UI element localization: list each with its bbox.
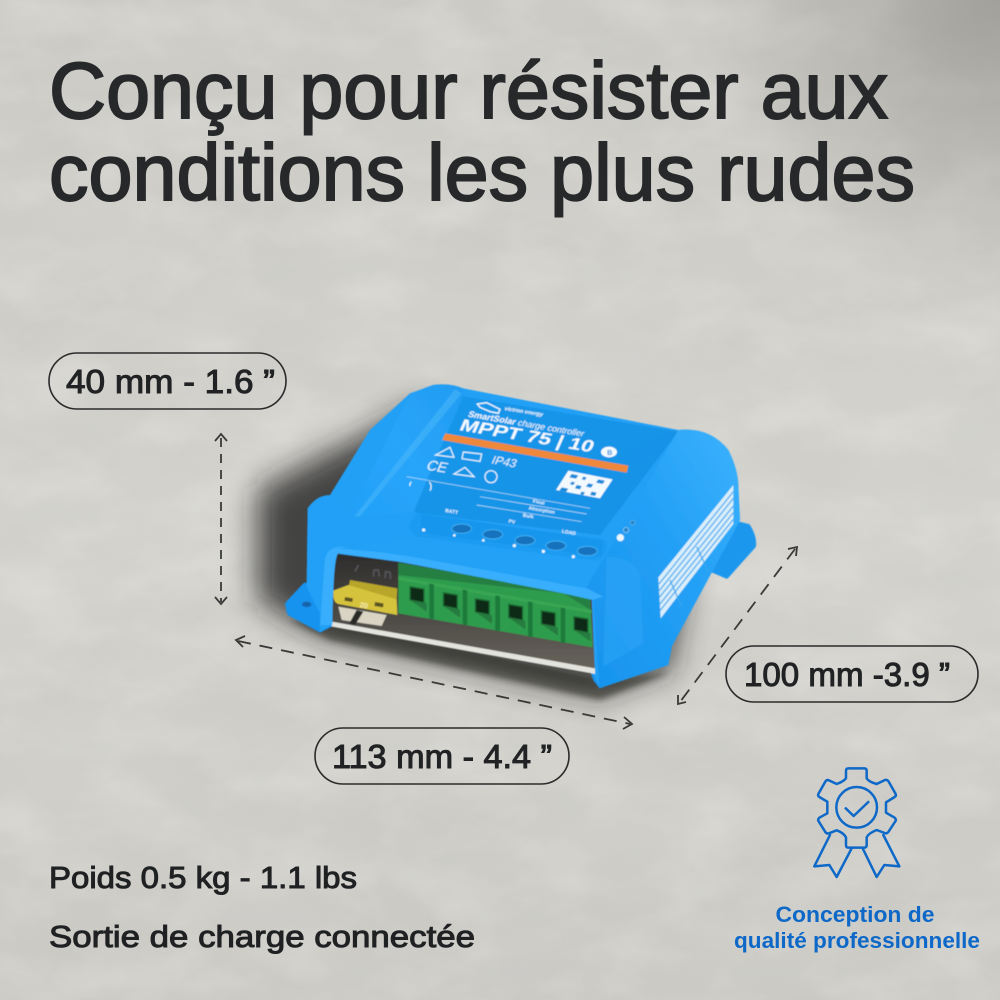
product: MPPT charge controller bbox=[287, 384, 754, 688]
depth pill: 100 mm -3.9 ” bbox=[744, 656, 950, 693]
product: MPPT charge controller: B bbox=[607, 448, 612, 457]
right rear mounting flange bbox=[703, 523, 754, 577]
title bbox=[49, 46, 915, 217]
dimension arrow: width bbox=[236, 636, 632, 729]
weight text: Poids 0.5 kg - 1.1 lbs bbox=[49, 860, 357, 895]
certification icons bbox=[410, 447, 497, 491]
bluetooth badge bbox=[601, 447, 617, 457]
top label: brand: victron energy bbox=[503, 406, 545, 418]
left mounting flange bbox=[287, 585, 335, 630]
green connector block bbox=[398, 563, 593, 647]
top panel bbox=[413, 396, 678, 535]
right front mounting flange bbox=[587, 643, 670, 686]
certification text bbox=[424, 453, 520, 477]
yellow fuse bbox=[333, 580, 397, 615]
main body bbox=[307, 384, 740, 688]
charge data table: PV bbox=[508, 519, 516, 526]
height pill: 40 mm - 1.6 ” bbox=[66, 363, 275, 400]
title: Conçu pour résister aux bbox=[49, 46, 888, 135]
battery terminal opening bbox=[332, 553, 595, 673]
terminal screw strip bbox=[409, 513, 607, 560]
device shadow bbox=[258, 405, 690, 700]
charge data table: BATT bbox=[445, 508, 458, 516]
load output text: Sortie de charge connectée bbox=[49, 919, 475, 954]
left rail bbox=[350, 384, 464, 523]
status LEDs bbox=[617, 520, 635, 541]
icon caption: Conception de bbox=[776, 902, 934, 927]
certification text: IP43 bbox=[489, 453, 520, 470]
depth pill bbox=[726, 646, 978, 702]
screw holes bbox=[302, 602, 638, 668]
icon caption bbox=[734, 902, 980, 953]
orange bar bbox=[442, 433, 628, 473]
side label bbox=[658, 485, 733, 618]
charge data table: Absorption bbox=[528, 505, 555, 516]
certification text: CE bbox=[424, 458, 450, 477]
charge data table: LOAD bbox=[561, 529, 577, 537]
right end cap bbox=[585, 430, 740, 688]
charge data table: Bulk bbox=[522, 513, 534, 521]
left end cap bbox=[307, 496, 417, 625]
charge data table bbox=[407, 477, 590, 537]
QR code bbox=[556, 471, 613, 498]
title: conditions les plus rudes bbox=[49, 128, 915, 217]
top label: product name: SmartSolar charge controller bbox=[467, 409, 586, 438]
charge data table: Float bbox=[532, 499, 545, 507]
opening rim bbox=[320, 547, 603, 625]
top label: brand bbox=[457, 403, 617, 457]
width pill bbox=[315, 728, 569, 784]
fuse holder bbox=[338, 607, 387, 626]
white base strip bbox=[332, 622, 595, 674]
height pill bbox=[49, 353, 286, 409]
yellow fuse: 20 bbox=[359, 600, 369, 610]
icon caption: qualité professionnelle bbox=[734, 928, 980, 953]
top label: model: MPPT 75 | 10 bbox=[457, 415, 598, 456]
dimension arrow: depth bbox=[678, 547, 797, 704]
dimension arrow: height bbox=[215, 434, 227, 604]
icon: quality gear rosette bbox=[814, 768, 899, 877]
fuse prongs bbox=[355, 565, 391, 579]
terminal sockets bbox=[410, 587, 588, 633]
width pill: 113 mm - 4.4 ” bbox=[332, 738, 552, 775]
